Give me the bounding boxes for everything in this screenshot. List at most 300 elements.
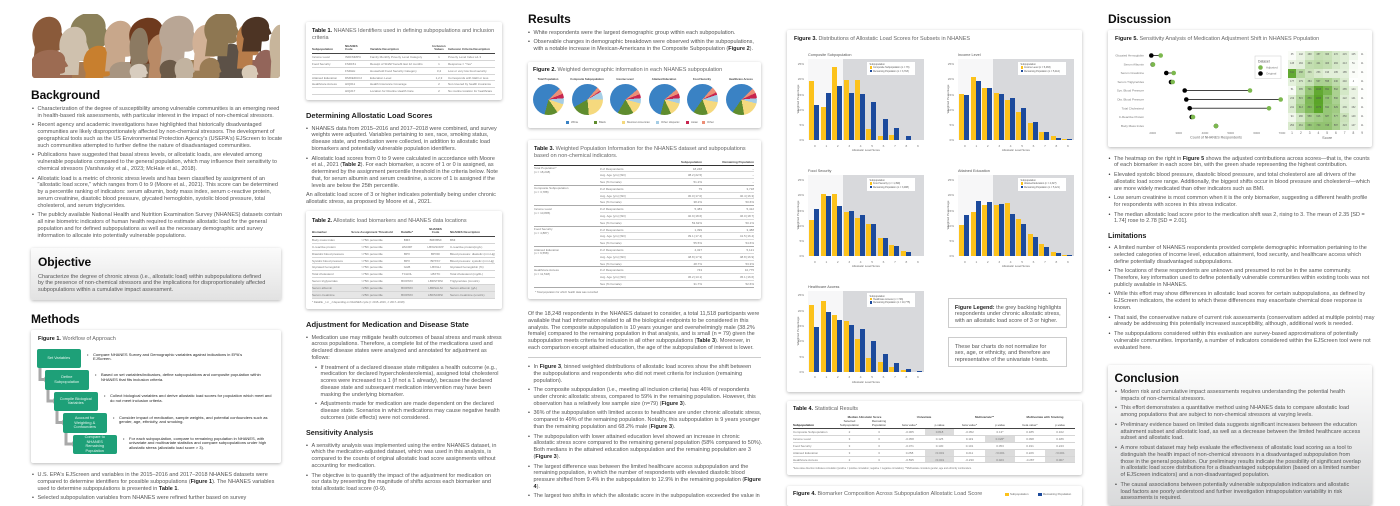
caption: figure 5: Figure 5. Sensitivity Analysis of Medication Adjustment Shift in NHANES Population	[1115, 36, 1319, 42]
chart: heatmap of adjusted contributions by score: 363	[1325, 53, 1329, 56]
chart: attained education: 2	[987, 260, 989, 264]
table: weighted population: Healthcare Access (n = 11,518)	[534, 268, 559, 276]
table: weighted population: Avg. Age (yrs) [SD]	[600, 275, 625, 279]
table: weighted population: 48.8 [16.9]	[740, 255, 754, 259]
table: weighted population: Food Security (n = 4,887)	[534, 227, 553, 235]
table: NHANES identifiers: Inclusion	[432, 44, 446, 48]
heatmap axis: score: Score	[1322, 136, 1332, 140]
step 5 description: allostatic stress (allostatic load score > 3).	[129, 445, 204, 450]
legend: demographic groups: Asian	[691, 120, 698, 124]
table: allostatic load biomarkers: Score Assignment Threshold	[351, 230, 393, 234]
table: statistical results: 0.125	[936, 437, 943, 441]
table: allostatic load biomarkers: Biomarker	[312, 230, 327, 234]
callout: figure legend	[948, 298, 1067, 328]
text: background bullets: in health-based risk assessments, with particular interest in the impact of non-chemical stressors.	[38, 113, 274, 119]
text: adjustment bullets	[306, 335, 502, 421]
table: allostatic load biomarkers: Total cholesterol (mg/dL)	[450, 272, 483, 276]
table: weighted population: Composite Subpopulation (n = 3,788)	[534, 186, 568, 194]
chart: attained education: 7	[1044, 260, 1046, 264]
chart: heatmap of adjusted contributions by score: 142	[1299, 53, 1303, 56]
chart: attained education: 6	[1033, 260, 1034, 264]
text: adjustment bullets: outcomes (side effects) were not considered.	[320, 415, 430, 421]
chart: composite subpopulation: Composite Subpopulation	[808, 53, 851, 57]
table: weighted population: 40.9 [18.6]	[688, 214, 702, 218]
text: sensitivity bullets: A sensitivity analysis was implemented using the entire NHANES dataset, in	[312, 443, 496, 449]
table: weighted population: 743	[697, 268, 702, 272]
workflow step 5: compare to remaining population: NHANES	[87, 439, 103, 444]
chart: dumbbell of biomarker counts: Adjusted	[1266, 66, 1278, 70]
chart: heatmap of adjusted contributions by score: 11	[1361, 124, 1363, 127]
chart: income level: 1	[975, 144, 977, 148]
text: sensitivity bullets	[306, 443, 496, 492]
legend: figure 4	[1005, 492, 1072, 496]
text: sensitivity bullets: our data by presenting the magnitude of shifts across each biomarker and	[312, 479, 491, 485]
table: NHANES identifiers: Receipt of SNAP benefit last 12 months	[370, 62, 423, 66]
chart: food security: 10%	[798, 224, 804, 228]
chart: dumbbell of biomarker counts: 3000	[1175, 131, 1182, 135]
table: allostatic load biomarkers: Serum creatinine (umol/L)	[450, 293, 485, 297]
text: conclusion bullets: those in the general population. Our preliminary results indicate the possibility of significant overlap	[1120, 459, 1361, 465]
chart: composite subpopulation: Weighted Percentage	[796, 85, 800, 113]
table: allostatic load biomarkers: <25th percentile	[361, 286, 383, 290]
text: limitations bullets: publicly available in NHANES.	[1114, 282, 1187, 288]
table: NHANES identifiers: Income Level	[312, 55, 330, 59]
chart: income level: 6	[1033, 144, 1034, 148]
legend: demographic groups: Other Hispanic	[661, 120, 680, 124]
chart: heatmap of adjusted contributions by score: 613	[1299, 106, 1303, 109]
chart: heatmap of adjusted contributions by score: 11	[1361, 53, 1363, 56]
table: NHANES identifiers: NHANES	[345, 44, 358, 48]
text: results bullets: The largest difference was between the limited healthcare access subpopulation and the	[534, 464, 748, 470]
table: weighted population: 5,121	[746, 248, 754, 252]
chart: heatmap of adjusted contributions by score: 430	[1334, 80, 1338, 83]
text: scoring bullets: NHANES data from 2015–2016 and 2017–2018 were combined, and survey	[312, 126, 497, 132]
chart: income level: 8	[1056, 144, 1057, 148]
chart: heatmap of adjusted contributions by score: 11	[1361, 71, 1363, 74]
chart: healthcare access: Healthcare Access	[808, 285, 839, 289]
table: NHANES identifiers: Not covered by health insurance	[448, 82, 491, 86]
chart: dumbbell of biomarker counts	[1115, 53, 1286, 140]
text: conclusion bullets: load factors are poorly understood and further investigation intrapopulation variability in risk	[1120, 488, 1342, 494]
table: allostatic load biomarkers: NHANES	[429, 227, 442, 231]
table: statistical results: 3	[849, 444, 850, 448]
table: statistical results: 3	[849, 451, 850, 455]
legend: demographic groups: Mexican American	[627, 120, 650, 124]
chart: dumbbell of biomarker counts: Count of NHANES Respondents	[1190, 136, 1242, 140]
text: conclusion bullets: assessments is required.	[1120, 495, 1181, 501]
table: statistical results: Univariate	[917, 415, 931, 419]
text: scoring bullets: that, for serum albumin and serum creatinine, a score of 1 is assigned if the	[312, 176, 495, 182]
chart: composite subpopulation: 3	[848, 144, 850, 148]
text: conclusion bullets: distinguish the health impact of non-chemical stressors in a disadvantaged subpopulation from	[1120, 452, 1350, 458]
text: results bullets: The composite subpopulation (i.e., meeting all inclusion criteria) has 46% of respondents	[534, 387, 749, 393]
table: statistical results: 3	[878, 458, 880, 462]
text: limitations bullets: vulnerable communities. Importantly, a number of indicators considered within the EJScreen tool were not	[1114, 338, 1371, 344]
table: statistical results: 3	[849, 437, 850, 441]
table: NHANES identifiers: 1	[438, 55, 440, 59]
chart: heatmap of adjusted contributions by score: 404	[1308, 62, 1312, 65]
chart: heatmap of adjusted contributions by score: 403	[1325, 62, 1329, 65]
step 3 description: Collect biological variables and derive allostatic load scores for population which meet and	[110, 393, 272, 398]
chart: income level: 0	[964, 144, 966, 148]
chart: composite subpopulation: 2	[837, 144, 839, 148]
table: allostatic load biomarkers: BPXSY	[430, 259, 440, 263]
table: weighted population: 46.0 [18.7]	[740, 214, 754, 218]
text: background bullets: information to allocate into potentially vulnerable populations.	[38, 232, 186, 238]
chart: food security: 6	[883, 260, 884, 264]
table: allostatic load biomarkers: C-reactive protein(mg/L)	[450, 245, 482, 249]
footnote: table 4: *beta value direction indicates correlation (positive = positive correlation; negative = negative correlation). **Multivariate considers gender, age and ethnicity confounders.	[793, 467, 972, 470]
panel: table 2	[306, 211, 502, 309]
text: objective statement	[38, 274, 265, 293]
table: allostatic load biomarkers: LBXHSCRP	[427, 245, 444, 249]
callout: normalization note: representative of the univariate t-tests.	[955, 357, 1048, 363]
table: NHANES identifiers: FSDHH	[345, 69, 355, 73]
table: statistical results: 0.191	[1026, 444, 1034, 448]
heatmap axis: score	[1291, 131, 1363, 140]
table: statistical results: Composite Subpopulation	[793, 430, 827, 434]
text: conclusion bullets: This effort demonstrates a quantitative method using NHANES data to compare allostatic load	[1120, 405, 1349, 411]
chart: composite subpopulation: 0%	[800, 138, 804, 142]
text: results bullets	[528, 364, 762, 499]
chart: heatmap of adjusted contributions by score: 268	[1308, 53, 1312, 56]
chart: heatmap of adjusted contributions by score: 558	[1325, 80, 1329, 83]
text: discussion bullets: The heatmap on the right in Figure 5 shows the adjusted contributions across scores—that is, the counts	[1114, 156, 1370, 162]
table: statistical results: beta value*	[902, 423, 917, 427]
panel: figure 3 distributions	[787, 30, 1082, 392]
table: weighted population: # of Respondents	[600, 228, 624, 232]
table: allostatic load biomarkers: >75th percentile	[361, 245, 383, 249]
caption: table 1: criteria	[312, 34, 329, 40]
heatmap axis: score: 6	[1335, 131, 1337, 135]
table: statistical results: Income Level	[793, 437, 811, 441]
table: weighted population: 1,399	[694, 228, 702, 232]
table: statistical results: <0.001	[935, 458, 944, 462]
chart: healthcare access: 1	[825, 375, 827, 379]
table: allostatic load biomarkers: >75th percentile	[361, 259, 383, 263]
heatmap axis: score: 3	[1309, 131, 1310, 135]
text: objective statement: by the presence of non-chemical stressors and the implications for disproportionately affected	[38, 280, 265, 286]
table: NHANES identifiers: Household Food Security Category	[370, 69, 417, 73]
text: adjustment bullets: declared disease states were analyzed and annotated for adjustment as	[312, 348, 487, 354]
table: weighted population: Subpopulation	[681, 160, 702, 164]
workflow step 3: compile biological variables: Variables	[68, 400, 84, 405]
chart: food security: 0	[814, 260, 816, 264]
step 2 description	[101, 373, 261, 383]
table: allostatic load biomarkers: C-reactive protein	[312, 245, 336, 249]
chart: income level: Allostatic Load Score	[1002, 148, 1030, 152]
text: conclusion bullets: among populations that are subject to non-chemical stressors at varying levels.	[1120, 412, 1313, 418]
text: discussion bullets: allostatic load score range. Additionally, the biggest shifts occur in blood pressure and cholesterol—which	[1114, 179, 1370, 185]
chart: food security: Food Security (n = 1,399)	[873, 182, 900, 185]
table: statistical results: p-value	[1055, 423, 1065, 427]
text: results paragraph: female) compared to the remaining population in that analysis, and is small (n = 79) given the	[528, 331, 755, 337]
table: weighted population: 53.3%	[745, 262, 754, 266]
chart: healthcare access	[796, 285, 924, 384]
arrows: workflow connectors	[38, 368, 73, 447]
table: weighted population: 52.6%	[745, 282, 754, 286]
chart: heatmap of adjusted contributions by score: 145	[1290, 62, 1294, 65]
table: weighted population: 3,488	[746, 228, 754, 232]
text: background bullets: Publications have suggested that basal stress levels, or allostatic loads, are elevated among	[38, 152, 262, 158]
chart: heatmap of adjusted contributions by score: 587	[1334, 124, 1338, 127]
panel: table 4 statistical results	[787, 401, 1082, 475]
chart: dumbbell of biomarker counts: Serum Creatinine	[1121, 71, 1144, 75]
text: sensitivity bullets: total allostatic load score (0-9).	[312, 486, 386, 492]
table: statistical results: -0.230	[965, 458, 974, 462]
step 5 description: For each subpopulation, compare to remaining population in NHANES, with	[129, 436, 264, 440]
table: allostatic load biomarkers: BMI	[450, 238, 455, 242]
chart: food security: 2	[837, 260, 839, 264]
text: discussion bullets	[1108, 156, 1370, 224]
table: allostatic load biomarkers: Serum creatinine	[312, 293, 335, 297]
table: statistical results: Remaining	[872, 419, 886, 423]
text: methods bullets	[32, 472, 274, 500]
chart: heatmap of adjusted contributions by score: 147	[1351, 124, 1355, 127]
text: results bullets: Both medians in the attained education subpopulation and the remaining population are 3	[534, 447, 751, 453]
text: results intro bullets: with a notable increase in Mexican-Americans in the Composite Subpopulation (Figure 2).	[534, 46, 753, 52]
chart: food security	[796, 169, 924, 268]
chart: heatmap of adjusted contributions by score: 891	[1325, 88, 1329, 91]
table: weighted population: Sex (% Female)	[600, 180, 622, 184]
table: statistical results: 2	[849, 458, 850, 462]
text: limitations bullets: already be addressing this potentially increased susceptibility, although, additional work is needed.	[1114, 321, 1353, 327]
step 1 description: EJScreen.	[93, 356, 112, 361]
table: weighted population: 39.1 [17.4]	[688, 234, 702, 238]
text: adjustment bullets: Adjustments made for medication are made dependent on the declared	[320, 401, 494, 407]
table: NHANES identifiers: 1,2,3	[436, 76, 442, 80]
chart: food security: Remaining Population (n = 3,488)	[873, 186, 909, 189]
text: scoring bullets: et al., 2021 (Table 2). For each biomarker, a score of 1 or 0 is assigned, as	[312, 162, 494, 168]
chart: dumbbell of biomarker counts: Original	[1266, 72, 1277, 76]
chart: income level: 5	[1021, 144, 1023, 148]
legend: figure 4: Subpopulation	[1010, 492, 1028, 496]
table: statistical results: 0.023	[996, 458, 1004, 462]
chart: healthcare access: 2	[837, 375, 839, 379]
callout: figure legend: respondents under chronic allostatic stress,	[955, 311, 1061, 317]
table: allostatic load biomarkers	[312, 227, 495, 299]
table: statistical results: 0.101	[966, 444, 973, 448]
text: background bullets	[32, 106, 282, 238]
pie: composite subpopulation	[570, 78, 604, 115]
table: allostatic load biomarkers: >75th percentile	[361, 252, 383, 256]
chart: dumbbell of biomarker counts: Glycated Hemoglobin	[1115, 54, 1144, 58]
text: background bullets: The publicly available National Health and Nutrition Examination Survey (NHANES) datasets contain	[38, 212, 282, 218]
table: statistical results: Population	[872, 423, 886, 427]
chart: composite subpopulation: Remaining Population (n = 3,718)	[873, 70, 909, 73]
workflow step 4: account for weighting and confounders: Weighting &	[74, 420, 95, 425]
chart: attained education	[946, 169, 1074, 268]
pie: total population	[533, 78, 564, 115]
table: NHANES identifiers: INDFMMPC	[345, 55, 361, 59]
table: NHANES identifiers: Family Monthly Poverty Level Category	[370, 55, 422, 59]
text: limitations bullets: selected categories of income level, education attainment, food security, and healthcare access which	[1114, 252, 1361, 258]
table: statistical results: 0.162	[1056, 430, 1064, 434]
table: NHANES identifiers: Variable Description	[370, 47, 399, 51]
table: NHANES identifiers: Subpopulation	[312, 47, 333, 51]
text: adjustment bullets: Medication use may mitigate health outcomes of basal stress and mask stress	[312, 335, 502, 341]
table: allostatic load biomarkers: >75th percentile	[361, 279, 383, 283]
text: discussion bullets: Low serum creatinine is most common when it is the only biomarker, suggesting a different health profile	[1114, 195, 1367, 201]
text: background bullets: Recent agency and academic investigations have highlighted that historically disadvantaged	[38, 122, 262, 128]
chart: heatmap of adjusted contributions by score: 149	[1351, 115, 1355, 118]
table: weighted population: 50.6%	[745, 200, 754, 204]
chart: income level: 9	[1067, 144, 1069, 148]
chart: heatmap of adjusted contributions by score: 253	[1316, 71, 1320, 74]
text: background bullets: chemical stressors (Varshavsky et al., 2023; McHale et al., 2018).	[38, 166, 197, 172]
table: statistical results: <0.001	[935, 451, 944, 455]
pie: attained education: Attained Education	[652, 78, 676, 81]
table: NHANES identifiers: Values	[434, 47, 444, 51]
chart: food security: 5	[871, 260, 873, 264]
callout: normalization note: sex, age, or ethnicity, and therefore are	[955, 350, 1050, 356]
heatmap axis: score: 5	[1326, 131, 1328, 135]
chart: heatmap of adjusted contributions by score: 725	[1325, 97, 1329, 100]
table: allostatic load biomarkers: BIOPRO	[401, 279, 413, 283]
chart: food security: 8	[906, 260, 907, 264]
chart: heatmap of adjusted contributions by score: 728	[1325, 124, 1329, 127]
text: results bullets: pressure shifted from 9.4% in the subpopulation to 12.9% in the remaining population (Figure	[534, 477, 761, 483]
table: statistical results: 3	[878, 437, 880, 441]
table: NHANES identifiers: Response = "Yes"	[448, 62, 472, 66]
table: statistical results: 0.098	[1026, 437, 1034, 441]
table: NHANES identifiers: No routine location for healthcare	[448, 89, 492, 93]
text: discussion bullets: are more widely medicated than other indicators such as BMI.	[1114, 186, 1264, 192]
heatmap axis: score: 7	[1344, 131, 1346, 135]
chart: attained education: Attained Education	[958, 169, 990, 173]
table: NHANES identifiers: 2	[438, 82, 440, 86]
step 1 description	[93, 352, 242, 362]
step 5 description: univariate and multivariate statistics and compare subpopulations under high	[129, 440, 266, 445]
table: statistical results: -0.595	[905, 458, 914, 462]
chart: heatmap of adjusted contributions by score: 616	[1316, 115, 1320, 118]
chart: dumbbell of biomarker counts: Total Cholesterol	[1122, 106, 1144, 110]
table: weighted population: 53.62%	[692, 221, 702, 225]
table: weighted population: 45.1 [16.6]	[740, 275, 754, 279]
chart: attained education: Remaining Population (n = 5,121)	[1024, 186, 1060, 189]
table: allostatic load biomarkers: Datafile*	[401, 230, 413, 234]
chart: healthcare access: 5	[871, 375, 873, 379]
chart: heatmap of adjusted contributions by score: 515	[1299, 97, 1303, 100]
caption: figure 4: Figure 4. Biomarker Composition Across Subpopulation Allostatic Load Score	[793, 490, 982, 496]
chart: heatmap of adjusted contributions by score: 241	[1290, 106, 1294, 109]
table: weighted population: Remaining Population	[722, 160, 754, 164]
chart: attained education: Attained Education (n = 4,327)	[1024, 182, 1056, 185]
table: statistical results: -0.052	[965, 430, 974, 434]
text: scoring bullets: levels are below the 25th percentile.	[312, 183, 399, 189]
chart: food security: Allostatic Load Score	[852, 264, 880, 268]
text: objective statement: Characterize the degree of chronic stress (i.e., allostatic load) within subpopulations defined	[38, 274, 261, 280]
text: discussion bullets: 1.74] rose to 2.78 [SD = 2.01].	[1114, 218, 1188, 224]
text: methods bullets: used to determine subpopulations is presented in Table 1.	[38, 486, 179, 492]
text: objective statement: subpopulations within a cumulative impact assessment.	[38, 287, 173, 293]
workflow step 5: compare to remaining population: Remaining	[85, 443, 104, 448]
table: NHANES identifiers: FSD151	[345, 62, 356, 66]
table: weighted population: 5,412	[746, 207, 754, 211]
chart: attained education: 5	[1021, 260, 1023, 264]
workflow step 5: compare to remaining population	[73, 434, 116, 454]
chart: composite subpopulation: 9	[917, 144, 919, 148]
table: statistical results: Subpopulation	[793, 423, 814, 427]
chart: attained education: 0%	[950, 254, 954, 258]
heatmap axis: score: 1	[1291, 131, 1293, 135]
table: weighted population: Avg. Age (yrs) [SD]	[600, 173, 625, 177]
text: limitations bullets: A limited number of NHANES respondents provided complete demographic information pertaining to the	[1114, 245, 1367, 251]
text: results bullets: remaining population, in which the number of respondents with elevated diastolic blood	[534, 470, 745, 476]
text: scoring bullets: weights were adjusted. Variables pertaining to sex, race, smoking status,	[312, 132, 488, 138]
table: weighted population: 4,327	[694, 248, 702, 252]
panel: objective	[31, 248, 281, 300]
heatmap axis: score: 8	[1353, 131, 1354, 135]
table: allostatic load biomarkers: >75th percentile	[361, 238, 383, 242]
text: results bullets: population).	[534, 378, 562, 384]
pie: composite subpopulation: Composite Subpopulation	[570, 78, 604, 81]
text: adjustment bullets: disease state and subsequent medication intervention may have been	[320, 385, 491, 391]
text: conclusion bullets: subset and allostatic load.	[1120, 435, 1184, 441]
chart: healthcare access: 3	[848, 375, 850, 379]
text: limitations bullets: The locations of these respondents are unknown and presumed to not be in the same community.	[1114, 268, 1351, 274]
text: results paragraph: available that had information related to all the biological endpoints to be considered in this	[528, 318, 748, 324]
chart: healthcare access: 9	[917, 375, 919, 379]
table: allostatic load biomarkers: GHB	[404, 265, 410, 269]
table: statistical results: p-value	[935, 423, 944, 427]
chart: food security: 25%	[798, 178, 804, 182]
text: methods bullets: U.S. EPA's EJScreen and variables in the 2015–2016 and 2017–2018 NHANES datasets were	[38, 472, 268, 478]
text: results bullets: observation has a relatively low sample size (n=79) (Figure 3).	[534, 401, 686, 407]
chart: healthcare access: Subpopulation	[870, 295, 885, 298]
heading: Sensitivity Analysis: Sensitivity Analysis	[306, 428, 373, 436]
table: weighted population: # of Respondents	[600, 268, 624, 272]
step 3 description	[110, 394, 272, 404]
chart: income level: 10%	[948, 108, 954, 112]
table: statistical results: -0.065	[905, 430, 914, 434]
chart: heatmap of adjusted contributions by score: 11	[1361, 115, 1363, 118]
chart: attained education: 10%	[948, 224, 954, 228]
text: results bullets: The subpopulation with lower attained education level showed an increase in chronic	[534, 434, 740, 440]
text: limitations bullets: evaluated here.	[1114, 344, 1152, 350]
table: statistical results: Multivariate with Smoking	[1026, 415, 1064, 419]
table: weighted population: 18,248	[693, 166, 702, 170]
chart: attained education: 25%	[948, 178, 954, 182]
text: results paragraph	[528, 311, 760, 351]
text: adjustment bullets: across populations. Therefore, a complete list of the medications used and	[312, 341, 493, 347]
table: weighted population: 40.4 [16.3]	[740, 194, 754, 198]
chart: heatmap of adjusted contributions by score: 1095	[1316, 97, 1321, 100]
workflow step 3: compile biological variables: Compile Biological	[60, 396, 92, 401]
table: statistical results: Subpopulation	[840, 423, 859, 427]
chart: healthcare access: Allostatic Load Score	[852, 380, 880, 384]
heading: Adjustment for Medication and Disease State: Adjustment for Medication and Disease State	[306, 320, 469, 329]
text: limitations bullets: That said, the conservative nature of current risk assessments (conservatism added at multiple points) may	[1114, 315, 1374, 321]
table: weighted population: 55.5%	[693, 241, 702, 245]
chart: dumbbell of biomarker counts: Dia. Blood Pressure	[1117, 98, 1144, 102]
text: results paragraph: subpopulation meets criteria for inclusion in all other subpopulations (Table 3). Moreover, in	[528, 338, 750, 344]
chart: attained education: 20%	[948, 193, 954, 197]
chart: heatmap of adjusted contributions by score: 213	[1343, 62, 1347, 65]
text: sensitivity bullets: The objective is to quantify the impact of the adjustment for medication on	[312, 473, 491, 479]
table: allostatic load biomarkers: NHANES Description	[450, 230, 480, 234]
table: statistical results: 0.185	[1026, 430, 1034, 434]
chart: composite subpopulation	[796, 53, 924, 152]
chart: composite subpopulation: 7	[894, 144, 896, 148]
table: NHANES identifiers: Healthcare Access	[312, 82, 337, 86]
heading: Limitations: Limitations	[1108, 231, 1146, 240]
table: statistical results: beta value*	[962, 423, 977, 427]
table: allostatic load biomarkers: LBXGH	[430, 265, 441, 269]
chart: heatmap of adjusted contributions by score: 141	[1351, 97, 1355, 100]
pie: food security: Food Security	[693, 78, 711, 81]
table: NHANES identifiers: Health Insurance Coverage	[370, 82, 407, 86]
